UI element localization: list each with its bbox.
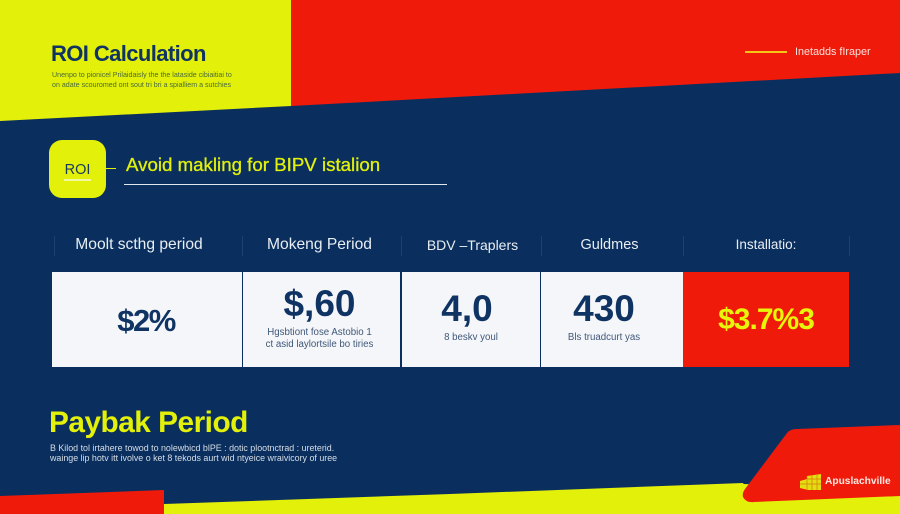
- intro text: Unenpo to pionicel Prilaidaisly the the lataside cibiaitiai to: [52, 71, 232, 79]
- logo icon: [800, 474, 821, 490]
- section heading: Avoid makling for BIPV istalion: [126, 154, 380, 175]
- table: Mokeng Period: [267, 236, 372, 253]
- table: [52, 236, 850, 367]
- section rule: [124, 184, 447, 185]
- cell 3: [402, 272, 540, 367]
- intro text: [52, 71, 232, 89]
- note: 8 beskv youl: [444, 332, 498, 343]
- payback text: wainge lip hotv itt ivolve o ket 8 tekods aurt wid ntyeice wraivicory of uree: [50, 453, 337, 463]
- note: Bls truadcurt yas: [568, 332, 640, 343]
- logo: [800, 474, 891, 490]
- table: Installatio:: [736, 237, 796, 252]
- table: BDV –Traplers: [427, 237, 518, 253]
- value: 4,0: [441, 288, 493, 329]
- payback heading: Paybak Period: [49, 406, 248, 439]
- label text: Inetadds fIraper: [795, 46, 871, 58]
- value: $3.7%3: [718, 303, 814, 336]
- badge connector: [106, 168, 116, 169]
- cell 1: [52, 272, 242, 367]
- intro text: on adate scouromed ont sout tri bri a spialliem a sutchies: [52, 81, 231, 89]
- value: 430: [573, 288, 635, 329]
- value: $2%: [117, 303, 175, 338]
- value: $,60: [283, 283, 356, 324]
- note: [266, 327, 373, 350]
- label line: [745, 51, 787, 53]
- cell 2: [243, 272, 400, 367]
- logo text: Apuslachville: [825, 476, 891, 487]
- header dividers: [54, 236, 55, 256]
- payback text: B Kilod tol irtahere towod to nolewbicd blPE : dotic plootnctrad : ureterid.: [50, 443, 334, 453]
- ROI badge icon: [49, 140, 106, 198]
- note: Hgsbtiont fose Astobio 1: [267, 327, 372, 338]
- payback text: [50, 443, 337, 463]
- table: Guldmes: [580, 237, 639, 253]
- title: ROI Calculation: [51, 41, 206, 66]
- note: ct asid laylortsile bo tiries: [266, 339, 373, 350]
- cell 4: [541, 272, 683, 367]
- cell 5 highlighted: [683, 272, 849, 367]
- column headings: Moolt scthg period: [75, 236, 203, 253]
- badge underline: [64, 179, 91, 181]
- badge text: ROI: [65, 162, 90, 178]
